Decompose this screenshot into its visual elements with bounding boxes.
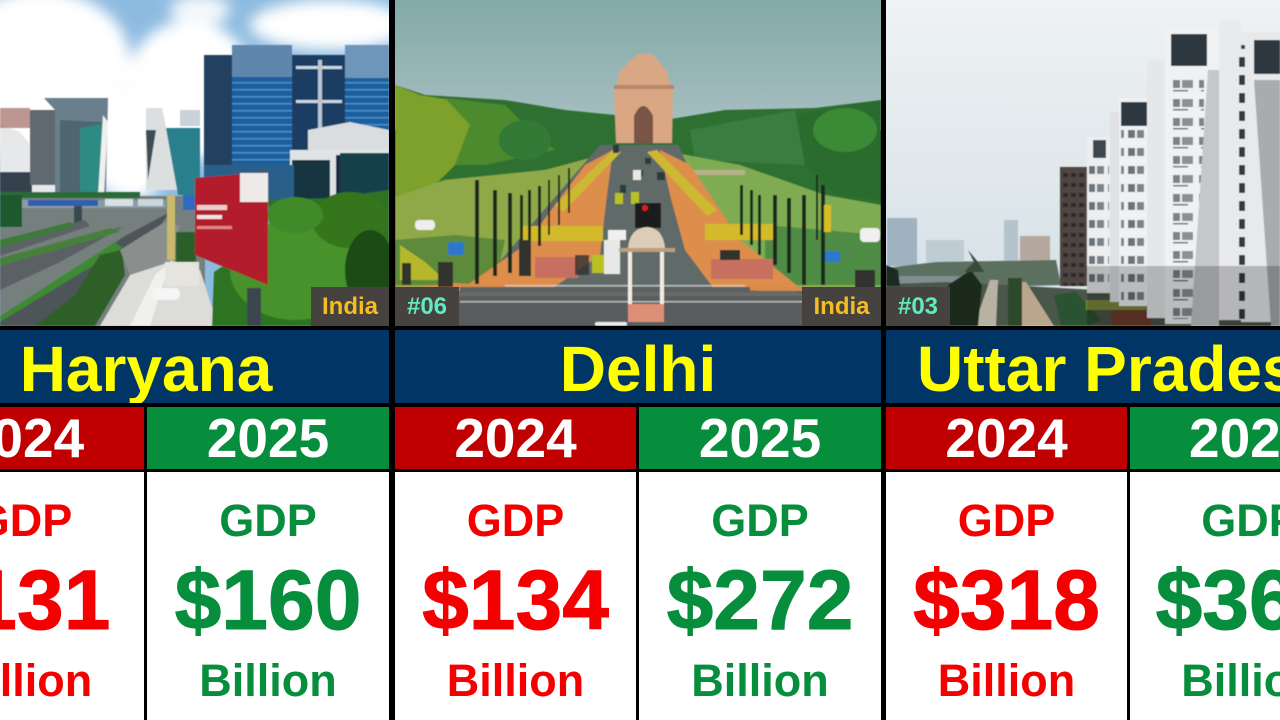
badge: India label, Haryana: India <box>322 293 378 320</box>
data cell: Haryana 2025 <box>147 472 389 720</box>
heading: Delhi: Delhi <box>560 333 716 403</box>
year header: Haryana 2024 <box>0 407 144 469</box>
badge: India label, Delhi <box>802 287 881 326</box>
badge: rank 06 <box>395 287 459 326</box>
badge: India label, Haryana <box>311 287 389 326</box>
data cell: Uttar Pradesh 2024: Billion <box>938 655 1075 706</box>
year header: Uttar Pradesh 2025 <box>1130 407 1280 469</box>
data cell: Delhi 2025 <box>639 472 881 720</box>
data cell: Delhi 2024 <box>395 472 636 720</box>
badge: India label, Delhi: India <box>813 293 870 320</box>
data cell: Uttar Pradesh 2025 <box>1130 472 1280 720</box>
data cell: Delhi 2024: $134 <box>422 553 609 647</box>
year header: Uttar Pradesh 2024: 2024 <box>945 407 1068 469</box>
heading: Haryana: Haryana <box>20 333 272 403</box>
data cell: Haryana 2025: GDP <box>219 495 317 546</box>
data cell: Delhi 2025: Billion <box>691 655 829 706</box>
data cell: Uttar Pradesh 2024 <box>886 472 1127 720</box>
year header: Haryana 2025: 2025 <box>207 407 329 469</box>
panel: Haryana photo <box>0 0 389 326</box>
badge: rank 06: #06 <box>407 293 447 320</box>
badge: rank 03: #03 <box>898 293 938 320</box>
year header: Delhi 2024 <box>395 407 636 469</box>
year header: Delhi 2025: 2025 <box>699 407 821 469</box>
data cell: Delhi 2024: Billion <box>447 655 584 706</box>
data cell: Haryana 2024 <box>0 472 144 720</box>
data cell: Delhi 2024: GDP <box>467 495 564 546</box>
panel: Uttar Pradesh photo <box>886 0 1280 326</box>
data cell: Delhi 2025: GDP <box>711 495 809 546</box>
data cell: Uttar Pradesh 2024: $318 <box>913 553 1100 647</box>
year header: Delhi 2025 <box>639 407 881 469</box>
heading: Delhi <box>395 330 881 403</box>
heading: Haryana <box>0 330 389 403</box>
kiosk with traffic light <box>635 203 661 228</box>
year header: Uttar Pradesh 2024 <box>886 407 1127 469</box>
year header: Delhi 2024: 2024 <box>454 407 577 469</box>
India Gate monument <box>614 54 674 143</box>
data cell: Uttar Pradesh 2024: GDP <box>958 495 1055 546</box>
data cell: Delhi 2025: $272 <box>667 553 853 647</box>
year header: Haryana 2025 <box>147 407 389 469</box>
badge: rank 03 <box>886 287 950 326</box>
data cell: Haryana 2025: Billion <box>199 655 337 706</box>
data cell: Haryana 2025: $160 <box>175 553 361 647</box>
panel: Delhi photo, India Gate <box>395 0 881 326</box>
